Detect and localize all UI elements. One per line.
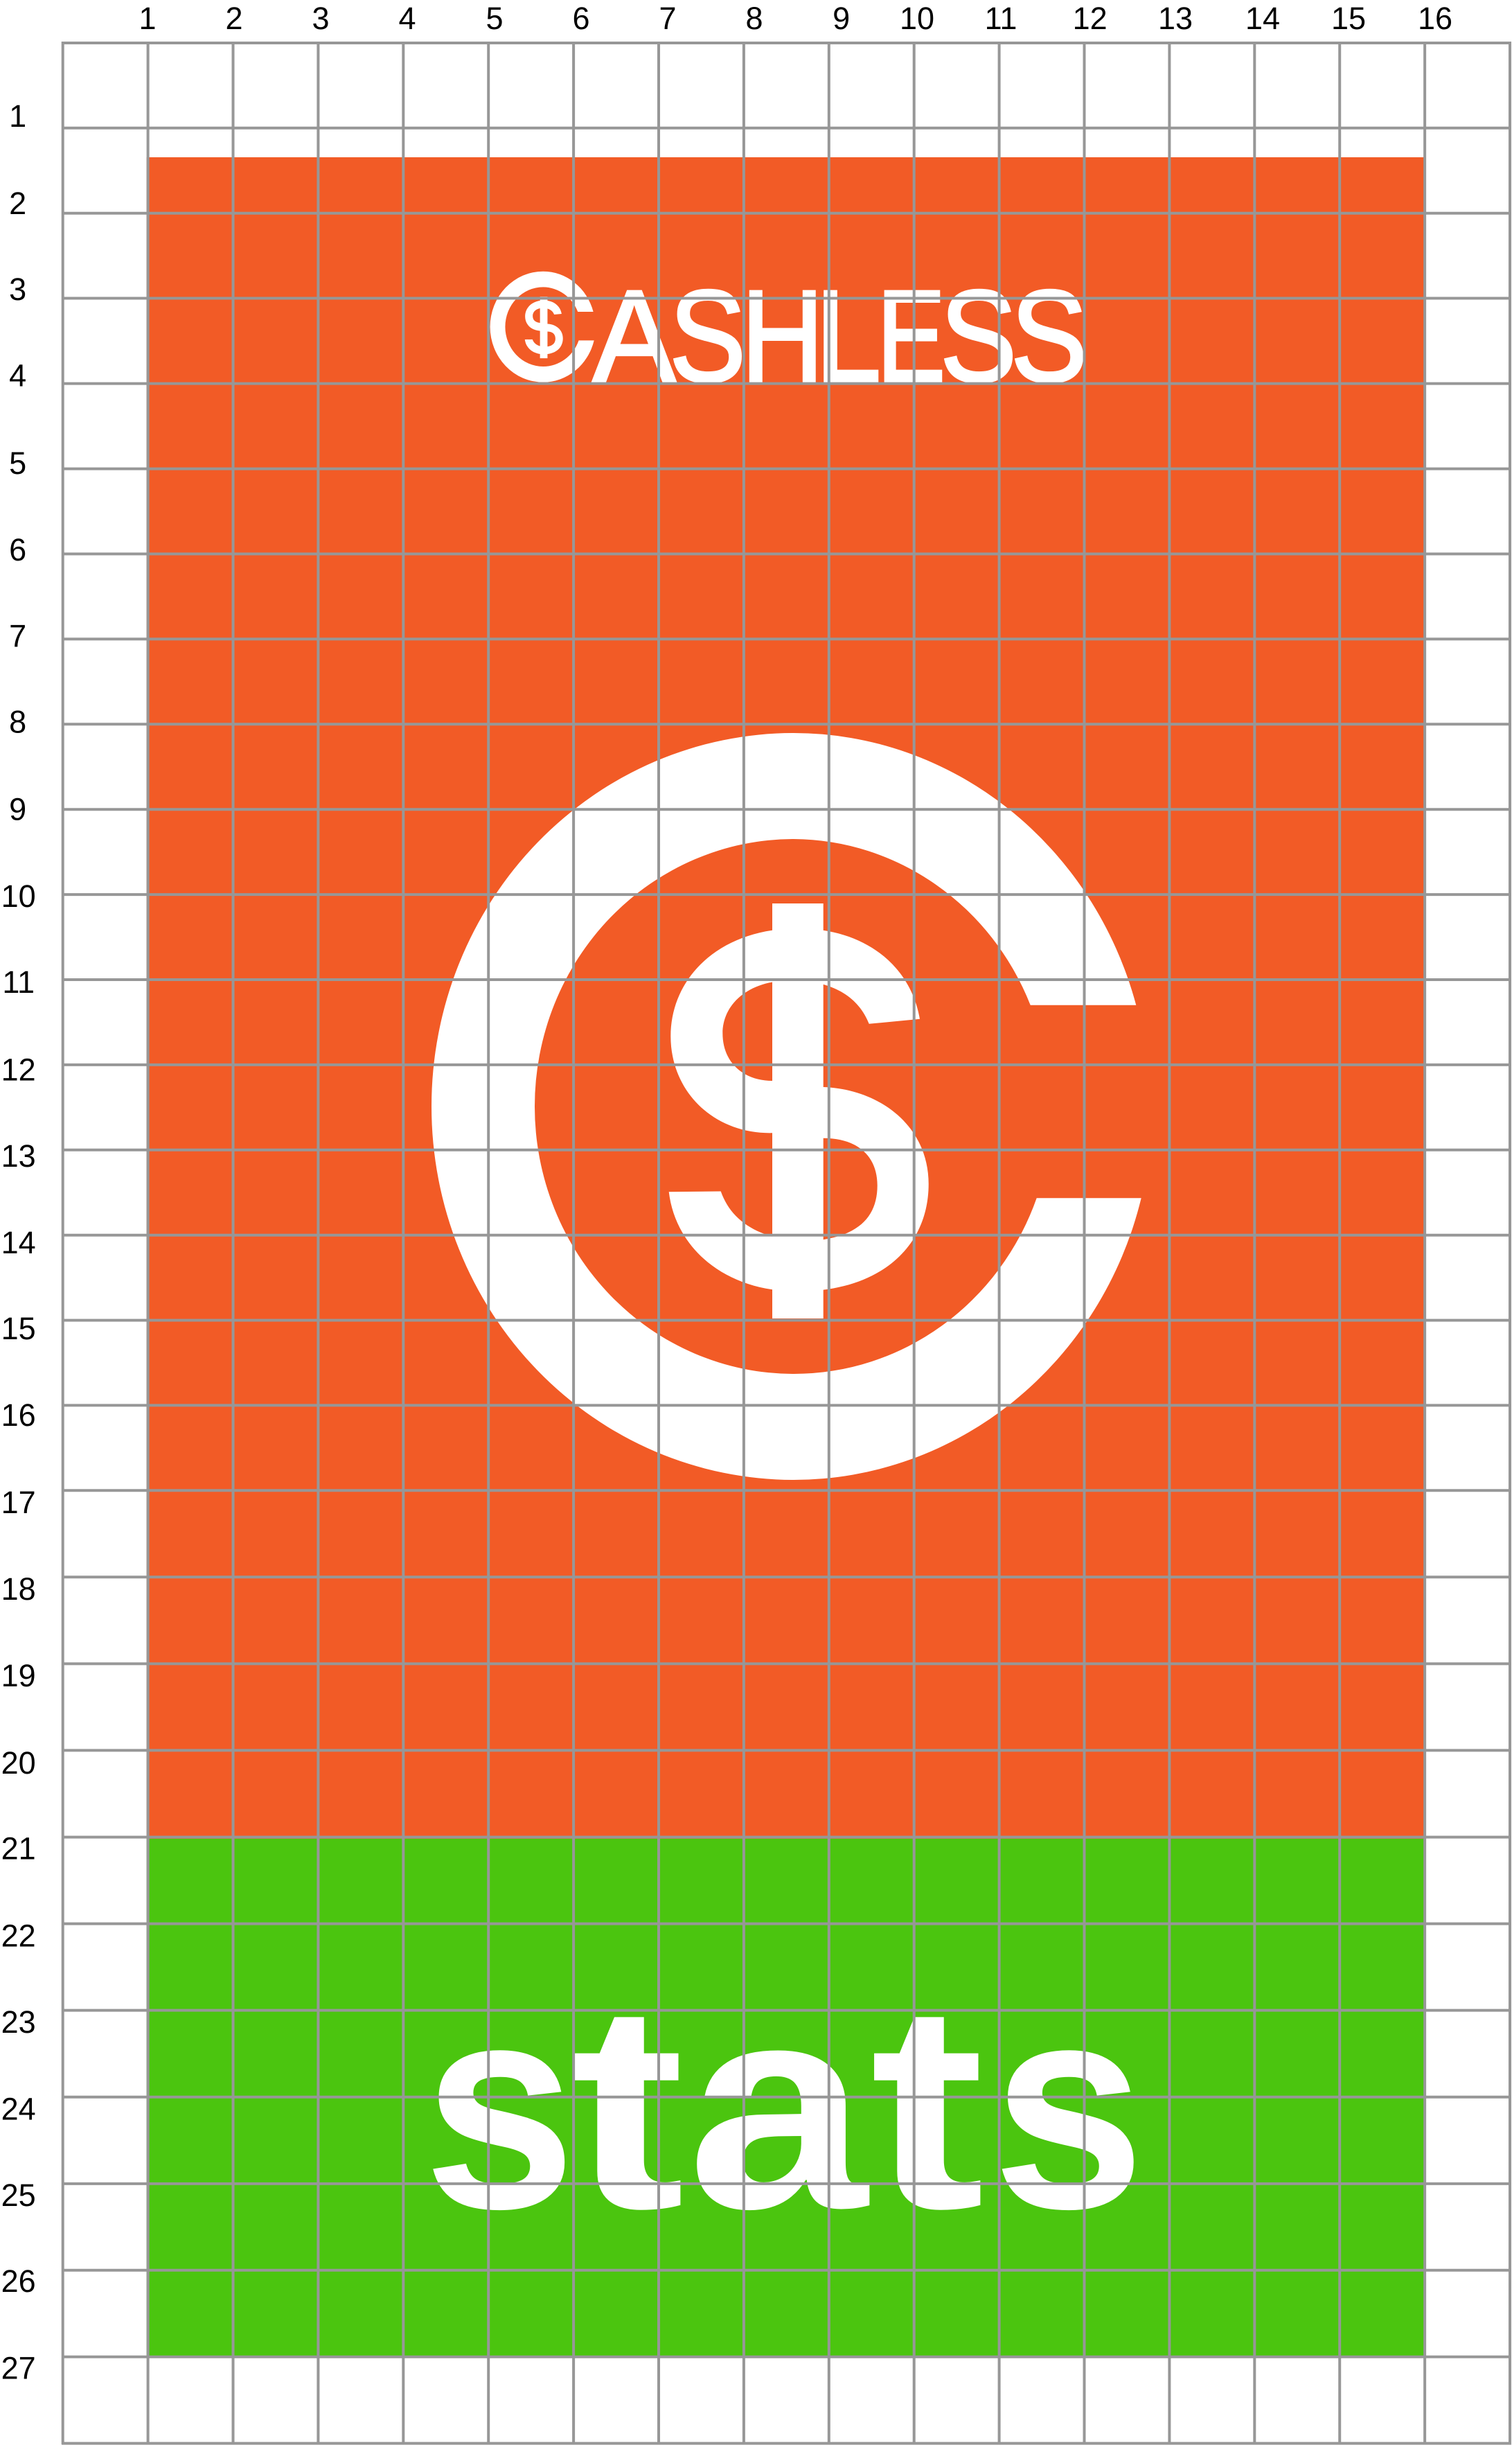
heading: stats: s [993,1943,1145,2270]
column numbers: 1 [139,1,157,36]
row numbers: 6 [9,532,26,567]
row numbers: 10 [1,879,36,914]
large C ring [432,733,1141,1480]
heading: stats [423,1943,1145,2270]
row numbers: 15 [1,1311,36,1346]
title wordmark: ASHLESS: A [593,263,675,409]
small cashless logo [490,263,1087,409]
column numbers: 13 [1158,1,1193,36]
row numbers: 21 [1,1831,36,1866]
column numbers: 7 [659,1,677,36]
row numbers: 1 [9,98,26,134]
row numbers: 11 [2,964,35,1000]
row numbers: 2 [9,186,26,221]
title wordmark: ASHLESS: L [815,264,881,409]
row numbers: 13 [1,1138,36,1174]
row numbers: 3 [9,272,26,307]
dollar bar [772,903,824,1318]
row numbers: 19 [1,1658,36,1693]
column numbers [139,1,1452,36]
row numbers: 20 [1,1745,36,1781]
title wordmark: ASHLESS: H [741,263,824,409]
icon: large C dollar mark [432,733,1141,1480]
row numbers: 17 [1,1485,36,1520]
row numbers: 24 [1,2092,36,2127]
row numbers: 18 [1,1571,36,1607]
row numbers: 4 [9,358,26,394]
column numbers: 6 [572,1,590,36]
heading: stats: t [570,1943,684,2270]
column numbers: 15 [1331,1,1366,36]
panel: orange cashless panel [147,157,1425,1839]
column numbers: 12 [1073,1,1108,36]
column numbers: 8 [745,1,763,36]
row numbers: 25 [1,2178,36,2213]
row numbers: 23 [1,2004,36,2040]
title wordmark: ASHLESS: E [877,263,945,409]
row numbers: 14 [1,1225,36,1260]
column numbers: 2 [225,1,243,36]
panel: green stats panel [147,1839,1425,2357]
column numbers: 4 [398,1,416,36]
dollar S curve [669,928,929,1291]
title wordmark: ASHLESS [593,263,1087,409]
column numbers: 3 [312,1,330,36]
row numbers: 16 [1,1397,36,1433]
row numbers [1,98,36,2386]
title wordmark: ASHLESS: S [941,263,1017,409]
column numbers: 14 [1245,1,1280,36]
row numbers: 22 [1,1918,36,1954]
column numbers: 10 [900,1,934,36]
row numbers: 9 [9,792,26,827]
title wordmark: ASHLESS: S [1011,263,1087,409]
column numbers: 16 [1418,1,1452,36]
heading: stats: a [687,1943,869,2270]
heading: stats: s [423,1943,576,2270]
row numbers: 5 [9,445,26,481]
row numbers: 7 [9,618,26,653]
column numbers: 11 [985,1,1017,36]
heading: stats: t [870,1943,984,2270]
column numbers: 5 [486,1,504,36]
title wordmark: ASHLESS: S [669,263,746,409]
row numbers: 12 [1,1052,36,1088]
icon: small C dollar mark [490,272,594,382]
row numbers: 8 [9,704,26,739]
row numbers: 26 [1,2263,36,2299]
row numbers: 27 [1,2350,36,2386]
column numbers: 9 [833,1,850,36]
